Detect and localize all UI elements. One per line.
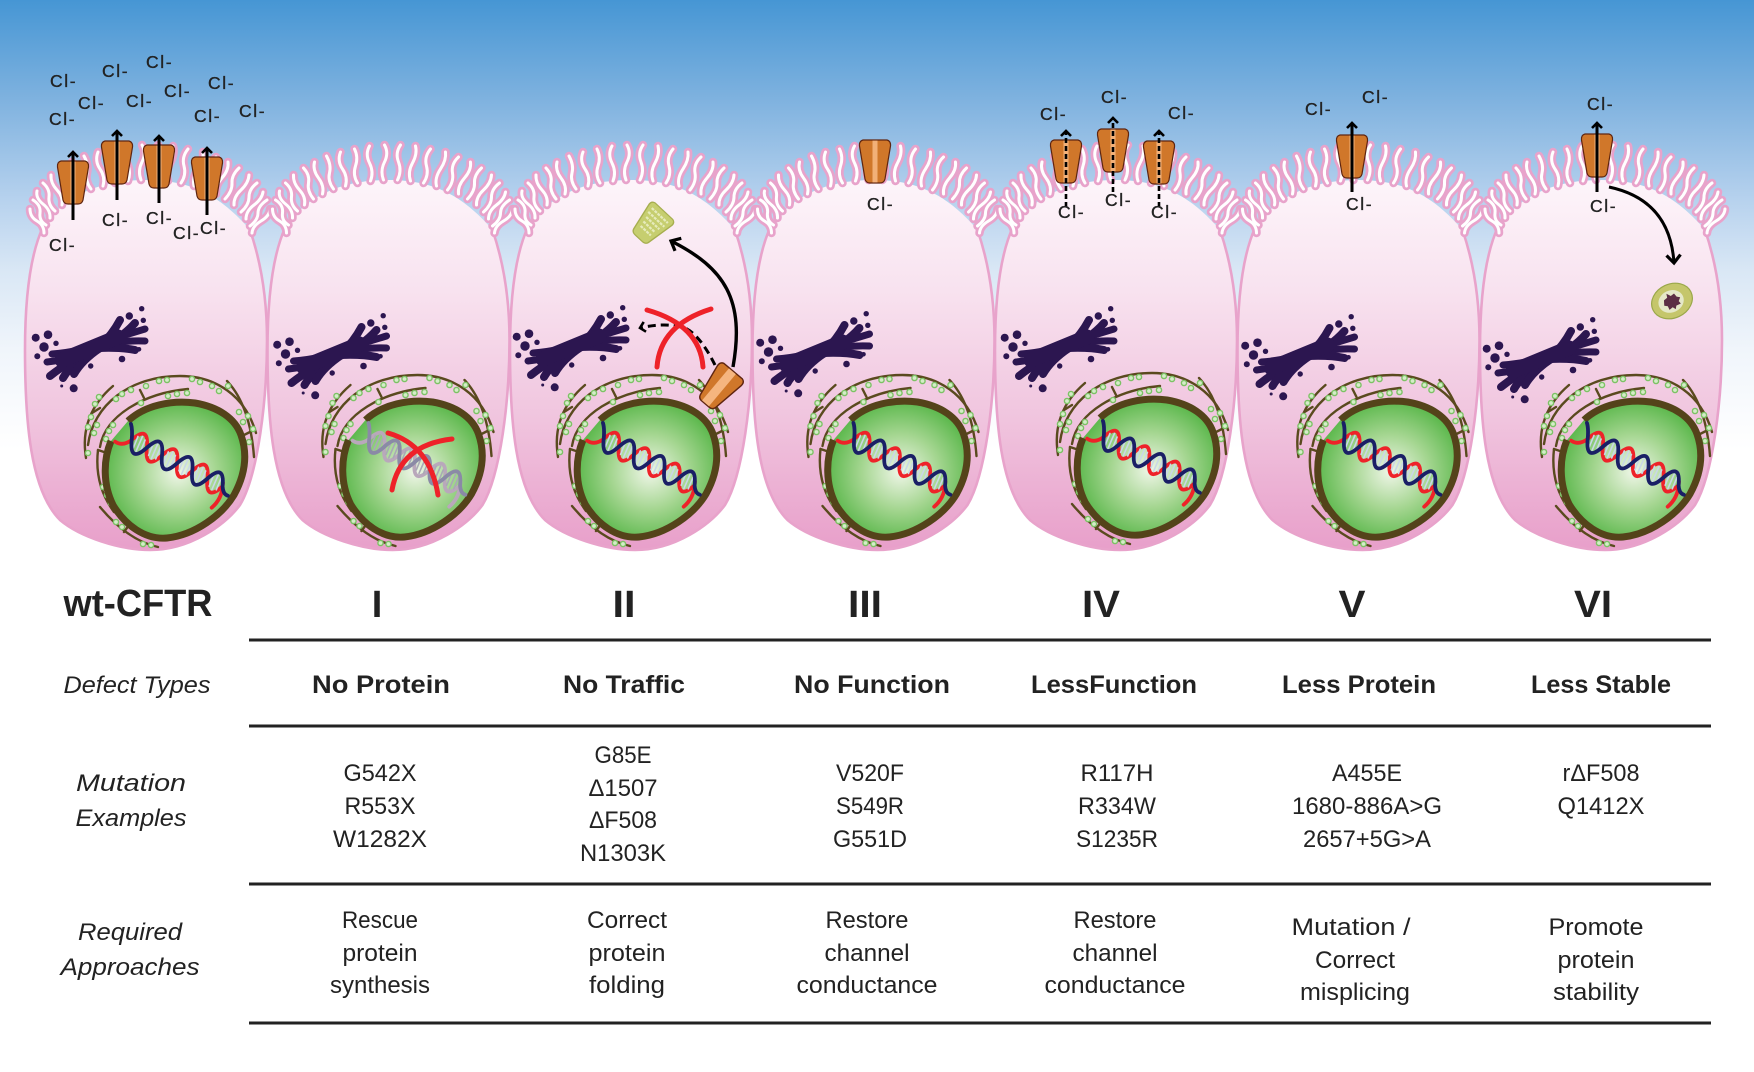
endoplasmic reticulum [1297, 375, 1468, 547]
DNA helix [580, 420, 709, 511]
cell body [268, 145, 512, 550]
nucleus [1318, 401, 1457, 537]
chloride ions: Cl- [102, 210, 129, 230]
heading: class labels: wt-CFTR [63, 583, 212, 625]
chloride ions: Cl- [126, 91, 153, 111]
row: required approaches: Required [78, 919, 183, 946]
arrow to degradation [671, 241, 736, 367]
chloride ions: Cl- [194, 106, 221, 126]
row: required approaches: stability [1553, 979, 1639, 1006]
chloride ions [1040, 87, 1195, 222]
row: mutation examples: W1282X [333, 826, 427, 853]
chloride ions: Cl- [49, 109, 76, 129]
icon: degrading lysosome [1646, 277, 1698, 325]
row: required approaches: conductance [796, 972, 938, 999]
row: mutation examples: R117H [1080, 760, 1154, 787]
row: mutation examples: V520F [836, 760, 904, 787]
chloride ions: Cl- [239, 101, 266, 121]
row: defect types: No Function [794, 671, 950, 699]
chloride ions: Cl- [1587, 94, 1614, 114]
DNA helix [1321, 420, 1449, 511]
cell body [1238, 145, 1482, 550]
chloride ions: Cl- [164, 81, 191, 101]
DNA helix [831, 420, 959, 511]
row: defect types [64, 671, 1671, 699]
heading: class labels: II [612, 584, 636, 626]
chloride ions: Cl- [1305, 99, 1332, 119]
nucleus [828, 401, 967, 537]
golgi apparatus [273, 313, 388, 399]
degraded channel [627, 201, 675, 249]
row: mutation examples: G551D [833, 826, 907, 853]
heading: class labels: IV [1082, 584, 1121, 626]
row: mutation examples: R334W [1078, 793, 1156, 820]
chloride ions: Cl- [1346, 194, 1373, 214]
golgi apparatus [1483, 317, 1597, 403]
row: required approaches [58, 907, 1644, 1006]
row: mutation examples: Q1412X [1558, 793, 1644, 820]
chloride ions: Cl- [146, 208, 173, 228]
row: mutation examples: Examples [76, 805, 186, 832]
golgi apparatus [1241, 314, 1356, 400]
panel: class VI cell [1480, 94, 1725, 550]
heading: class labels: VI [1574, 584, 1612, 626]
row: required approaches: protein [342, 940, 418, 967]
chloride ions [49, 52, 266, 255]
row: required approaches: Rescue [342, 907, 418, 934]
heading: class labels: III [848, 584, 882, 626]
chloride ions [1587, 94, 1617, 216]
chloride ions: Cl- [102, 61, 129, 81]
chloride ions: Cl- [1105, 190, 1132, 210]
row: required approaches: Correct [587, 907, 667, 934]
cell body [995, 145, 1240, 550]
red cross [388, 433, 452, 495]
row: defect types: Defect Types [64, 672, 210, 699]
heading: class labels: I [372, 584, 382, 626]
row: required approaches: conductance [1044, 972, 1186, 999]
chloride ions: Cl- [208, 73, 235, 93]
row: mutation examples: S1235R [1076, 826, 1158, 853]
channel with arrow [1581, 123, 1613, 192]
row: mutation examples: G85E [594, 742, 652, 769]
row: mutation examples: R553X [344, 793, 416, 820]
chloride ions: Cl- [146, 52, 173, 72]
endoplasmic reticulum [322, 375, 494, 547]
channels with dashed arrows [1050, 118, 1175, 207]
chloride ions: Cl- [49, 235, 76, 255]
nucleus [577, 401, 717, 537]
row: mutation examples: 2657+5G>A [1303, 826, 1431, 853]
row: required approaches: Mutation / [1292, 914, 1411, 941]
DNA helix [1080, 418, 1209, 509]
row: mutation examples [76, 742, 1644, 867]
chloride ions: Cl- [1168, 103, 1195, 123]
row: mutation examples: 1680-886A>G [1292, 793, 1442, 820]
DNA helix [1564, 420, 1693, 511]
arrow to lysosome [1609, 187, 1674, 263]
grey DNA helix [346, 420, 474, 511]
chloride ions: Cl- [1040, 104, 1067, 124]
golgi apparatus [32, 306, 146, 392]
row: required approaches: folding [589, 972, 665, 999]
cell body [752, 145, 998, 550]
chloride ion: Cl- [867, 194, 894, 214]
endoplasmic reticulum [1541, 375, 1712, 547]
panel: class IV cell [995, 87, 1240, 550]
closed channel [859, 140, 891, 183]
chloride ions: Cl- [173, 223, 200, 243]
panel: class I cell [268, 145, 512, 550]
row: required approaches: channel [824, 940, 910, 967]
misfolded channel at ER [694, 361, 745, 414]
cell body [25, 145, 270, 550]
panel: class III cell [752, 140, 998, 550]
golgi apparatus [1001, 306, 1115, 392]
row: required approaches: channel [1072, 940, 1158, 967]
nucleus [343, 401, 482, 537]
panel: class II cell [510, 145, 755, 550]
row: mutation examples: N1303K [580, 840, 666, 867]
table rules [249, 640, 1711, 1023]
row: mutation examples: A455E [1332, 760, 1402, 787]
cell body [510, 145, 755, 550]
row: mutation examples: Mutation [76, 770, 186, 797]
dashed arrow to golgi [640, 325, 715, 365]
row: required approaches: Restore [1074, 907, 1156, 934]
chloride ions: Cl- [1151, 202, 1178, 222]
row: defect types: No Protein [312, 671, 450, 699]
row: defect types: Less Stable [1531, 671, 1671, 699]
golgi apparatus [756, 311, 870, 397]
row: required approaches: protein [1558, 947, 1634, 974]
cell body [1480, 145, 1725, 550]
row: mutation examples: S549R [836, 793, 904, 820]
DNA helix [108, 421, 237, 512]
row: required approaches: protein [588, 940, 666, 967]
endoplasmic reticulum [85, 376, 256, 548]
nucleus [105, 402, 245, 538]
row: required approaches: synthesis [330, 972, 430, 999]
golgi apparatus [513, 305, 627, 391]
chloride ions: Cl- [50, 71, 77, 91]
row: mutation examples: rΔF508 [1562, 760, 1640, 787]
row: required approaches: Approaches [58, 954, 200, 981]
heading: class labels: V [1338, 584, 1366, 626]
CFTR channels with arrows [57, 131, 223, 220]
channel with arrow [1336, 123, 1368, 192]
chloride ions: Cl- [78, 93, 105, 113]
row: required approaches: misplicing [1300, 979, 1410, 1006]
row: required approaches: Promote [1548, 914, 1644, 941]
endoplasmic reticulum [557, 375, 728, 547]
endoplasmic reticulum [807, 375, 978, 547]
chloride ions: Cl- [1058, 202, 1085, 222]
row: defect types: LessFunction [1031, 671, 1197, 699]
row: defect types: No Traffic [563, 671, 685, 699]
row: mutation examples: Δ1507 [588, 775, 658, 802]
panel: class V cell [1238, 87, 1482, 550]
heading: class labels [63, 583, 1612, 626]
row: mutation examples: G542X [344, 760, 416, 787]
row: required approaches: Restore [826, 907, 908, 934]
panel: wt-CFTR cell [25, 52, 270, 550]
endoplasmic reticulum [1057, 373, 1228, 545]
chloride ions: Cl- [200, 218, 227, 238]
row: mutation examples: ΔF508 [589, 807, 657, 834]
chloride ions [1305, 87, 1389, 214]
nucleus [1077, 399, 1217, 535]
red cross [647, 309, 711, 367]
nucleus [1561, 401, 1701, 537]
chloride ions: Cl- [1362, 87, 1389, 107]
row: required approaches: Correct [1315, 947, 1395, 974]
row: defect types: Less Protein [1282, 671, 1436, 699]
chloride ions: Cl- [1590, 196, 1617, 216]
chloride ions: Cl- [1101, 87, 1128, 107]
